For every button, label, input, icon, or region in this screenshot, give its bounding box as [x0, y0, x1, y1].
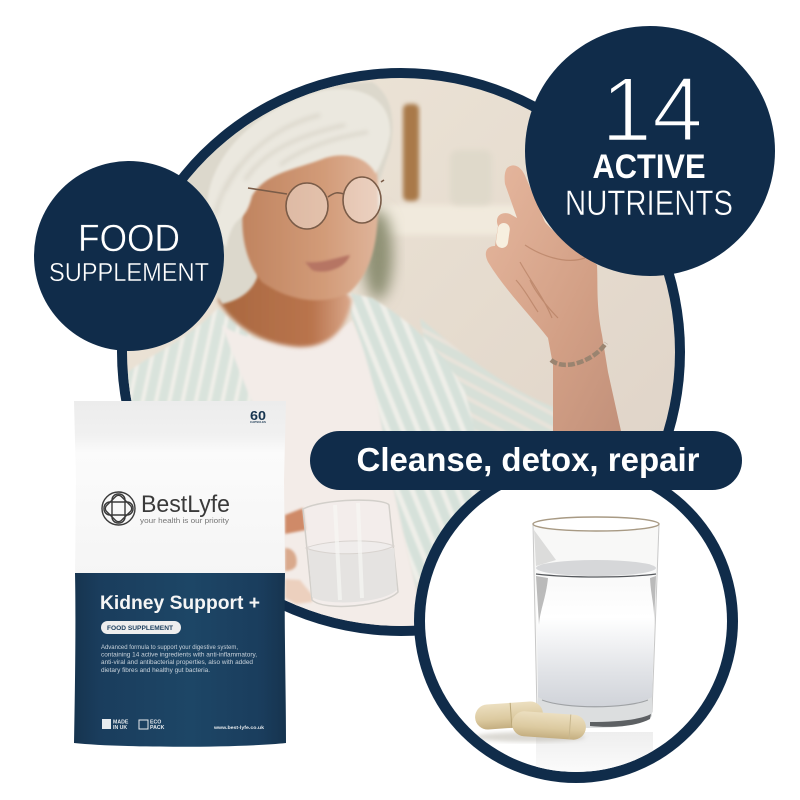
- banner: cleanse, detox, repair: [310, 431, 742, 490]
- eco pack mark: ECO: [150, 720, 161, 726]
- eco pack mark: PACK: [150, 725, 165, 731]
- pouch navy bottom: [74, 573, 286, 747]
- product description: dietary fibres and healthy gut bacteria.: [101, 667, 210, 674]
- photo background: room: [127, 78, 675, 626]
- capsule count: 60: [250, 409, 266, 423]
- tagline: your health is our priority: [140, 516, 229, 525]
- product description: Advanced formula to support your digestive system,: [101, 644, 238, 651]
- glass of water in photo: [303, 500, 398, 606]
- food supplement tag: [101, 621, 181, 634]
- badge: 14 active nutrients: 14: [601, 59, 703, 161]
- face: [242, 139, 378, 300]
- made in uk mark: [102, 719, 129, 731]
- website: www.best-lyfe.co.uk: [213, 725, 264, 731]
- raised arm and hand: [486, 165, 623, 440]
- product name: Kidney Support +: [100, 592, 260, 614]
- badge: food supplement: SUPPLEMENT: [49, 257, 209, 287]
- food supplement tag: FOOD SUPPLEMENT: [107, 625, 174, 632]
- shirt right front: [345, 292, 480, 590]
- made in uk mark: MADE: [113, 720, 129, 726]
- badge: 14 active nutrients: NUTRIENTS: [565, 184, 733, 223]
- capsule shadow: [475, 732, 585, 742]
- made in uk mark: IN UK: [113, 725, 127, 731]
- inset circle: glass of water and capsules: [414, 459, 738, 783]
- product description: containing 14 active ingredients with anti-inflammatory,: [101, 652, 257, 658]
- banner: cleanse, detox, repair: Cleanse, detox, repair: [356, 441, 700, 478]
- shirt left side: [128, 310, 290, 602]
- shirt sleeve: [420, 318, 557, 436]
- hair back: [180, 82, 393, 304]
- product pouch: [74, 401, 286, 747]
- icon: celtic knot logo: [102, 492, 135, 525]
- eco pack mark: [139, 720, 165, 731]
- main circle ring: [117, 68, 685, 636]
- mouth: [305, 255, 350, 272]
- white t-shirt: [226, 321, 417, 626]
- badge: 14 active nutrients: [525, 26, 775, 276]
- pouch white top: [74, 401, 286, 575]
- neck: [218, 260, 352, 347]
- capsule count: CAPSULES: [250, 420, 266, 424]
- hair front: [207, 89, 390, 248]
- badge: food supplement: [34, 161, 224, 351]
- finger creases: [516, 245, 585, 318]
- product description: [101, 644, 257, 674]
- photo: woman holding a capsule: [127, 78, 675, 626]
- glass reflection: [536, 732, 653, 772]
- fingers holding glass: [285, 508, 313, 604]
- water glass: [533, 517, 659, 728]
- product description: anti-viral and antibacterial properties, also with added: [101, 659, 254, 666]
- capsule back: [474, 701, 544, 730]
- badge: food supplement: FOOD: [78, 218, 180, 260]
- glasses: [248, 177, 384, 229]
- badge: 14 active nutrients: ACTIVE: [592, 148, 706, 186]
- hair strands: [215, 115, 368, 215]
- capsule front: [511, 710, 587, 741]
- capsule held in fingers: [496, 223, 510, 248]
- brand name: BestLyfe: [141, 491, 230, 518]
- bracelet: [551, 343, 606, 365]
